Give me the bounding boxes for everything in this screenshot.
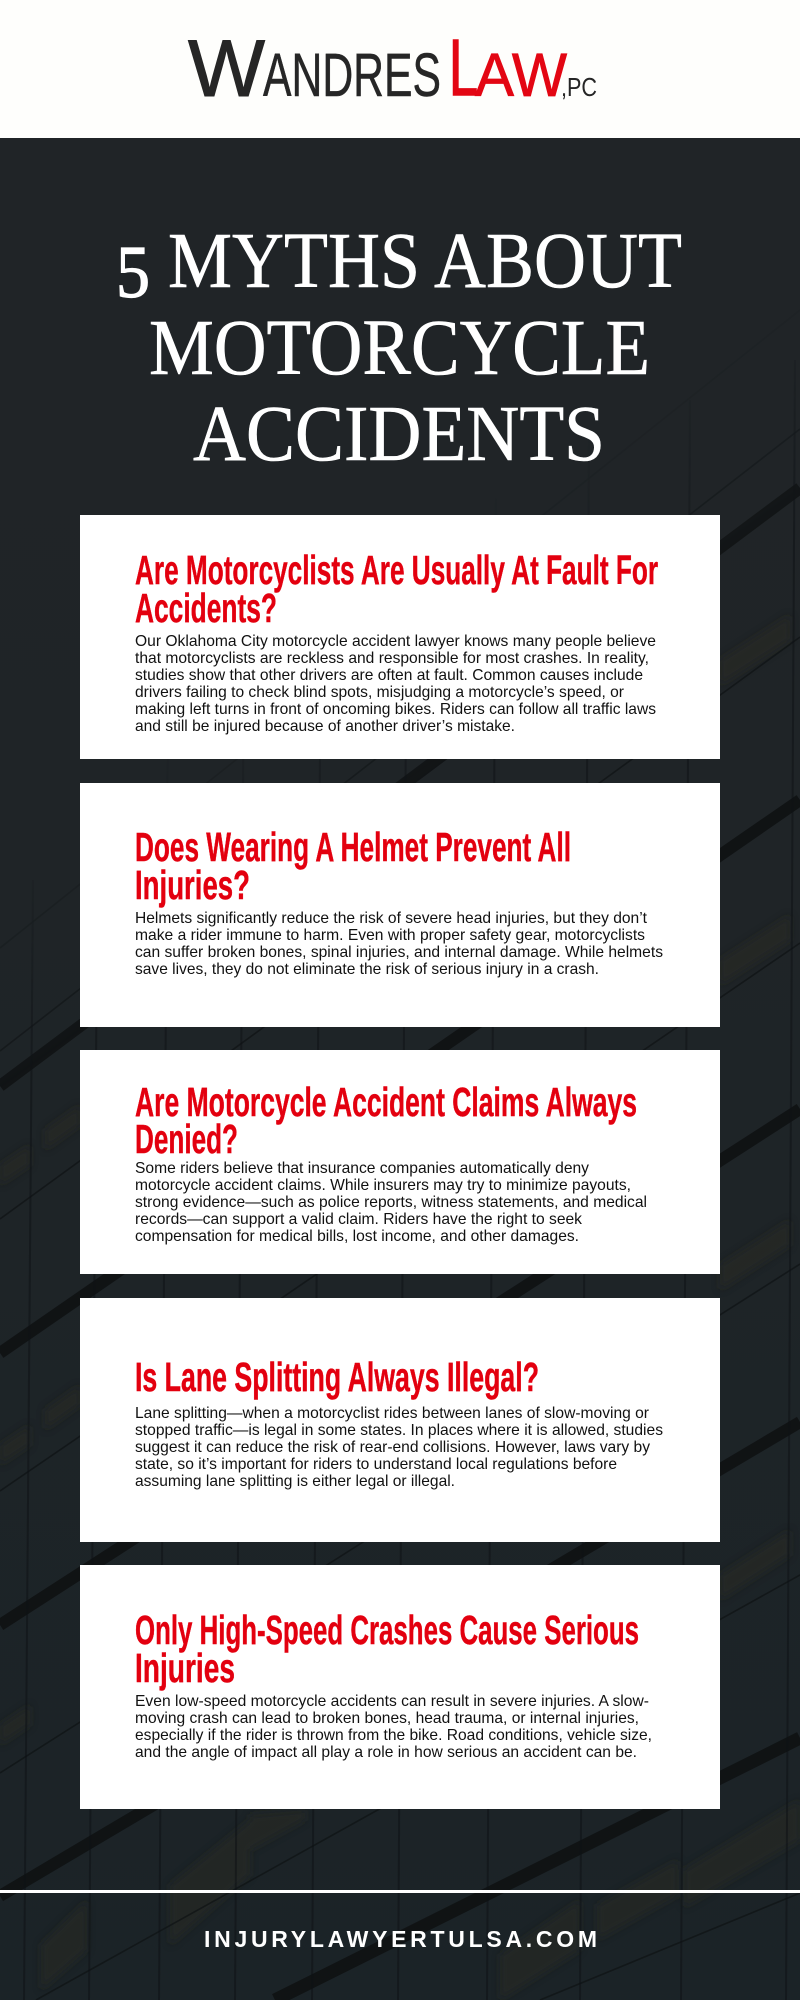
text: myth 5: and the angle of impact all play a role in how serious an accident can be. [135, 1744, 637, 1761]
text: myth 1: drivers failing to check blind spots, misjudging a motorcycle’s speed, or [135, 684, 625, 701]
text: myth 4: assuming lane splitting is either legal or illegal. [135, 1473, 455, 1490]
title: 5 [116, 232, 150, 314]
text: myth 2: make a rider immune to harm. Even with proper safety gear, motorcyclists [135, 927, 645, 944]
text: myth 1 [135, 633, 656, 735]
footer divider [0, 1890, 800, 1893]
footer website: INJURYLAWYERTULSA.COM [204, 1926, 597, 1952]
heading: myth 5: Injuries [135, 1645, 235, 1691]
logo: Wandres Law, PC: AW [475, 41, 567, 109]
logo: Wandres Law, PC: ,PC [561, 72, 597, 102]
text: myth 1: that motorcyclists are reckless and responsible for most crashes. In reality, [135, 650, 649, 667]
heading: myth 5 [135, 1607, 639, 1691]
text: myth 3 [135, 1160, 647, 1245]
text: myth 4: state, so it’s important for riders to understand local regulations before [135, 1456, 617, 1473]
logo: Wandres Law, PC: W [188, 24, 266, 114]
text: myth 3: Some riders believe that insurance companies automatically deny [135, 1160, 589, 1177]
panel: myth 4 [80, 1298, 720, 1542]
text: myth 3: compensation for medical bills, lost income, and other damages. [135, 1228, 579, 1245]
text: myth 1: Our Oklahoma City motorcycle accident lawyer knows many people believe [135, 633, 656, 650]
title [116, 218, 682, 478]
text: myth 3: motorcycle accident claims. While insurers may try to minimize payouts, [135, 1177, 631, 1194]
text: myth 5: especially if the rider is thrown from the bike. Road conditions, vehicle size, [135, 1727, 652, 1744]
logo: Wandres Law, PC: ANDRES [263, 41, 441, 109]
text: myth 1: studies show that other drivers are often at fault. Common causes include [135, 667, 643, 684]
heading: myth 4: Is Lane Splitting Always Illegal? [135, 1354, 539, 1400]
panel: myth 5 [80, 1565, 720, 1809]
text: myth 3: strong evidence—such as police reports, witness statements, and medical [135, 1194, 647, 1211]
text: myth 5: Even low-speed motorcycle accidents can result in severe injuries. A slow- [135, 1693, 649, 1710]
text: myth 2: Helmets significantly reduce the risk of severe head injuries, but they don’t [135, 910, 648, 927]
panel: myth 2 [80, 783, 720, 1027]
panel: myth 1 [80, 515, 720, 759]
heading: myth 2 [135, 824, 571, 908]
heading: myth 2: Does Wearing A Helmet Prevent All [135, 824, 571, 870]
text: myth 1: making left turns in front of oncoming bikes. Riders can follow all traffic laws [135, 701, 656, 718]
text: myth 5 [135, 1693, 652, 1761]
header band [0, 0, 800, 138]
text: myth 3: records—can support a valid claim. Riders have the right to seek [135, 1211, 583, 1228]
text: myth 2: can suffer broken bones, spinal injuries, and internal damage. While helmets [135, 944, 663, 961]
heading: myth 1 [135, 547, 658, 631]
logo: Wandres Law, PC: L [449, 23, 478, 112]
heading: myth 2: Injuries? [135, 862, 250, 908]
heading: myth 3: Denied? [135, 1116, 238, 1162]
text: myth 5: moving crash can lead to broken bones, head trauma, or internal injuries, [135, 1710, 639, 1727]
text: myth 4: stopped traffic—is legal in some states. In places where it is allowed, studies [135, 1422, 663, 1439]
heading: myth 3 [135, 1079, 637, 1162]
text: myth 4: Lane splitting—when a motorcyclist rides between lanes of slow-moving or [135, 1405, 650, 1422]
logo: Wandres Law, PC [188, 23, 597, 114]
text: myth 2 [135, 910, 663, 978]
heading: myth 1: Accidents? [135, 585, 277, 631]
text: myth 2: save lives, they do not eliminate the risk of serious injury in a crash. [135, 961, 599, 978]
title: MOTORCYCLE [149, 305, 650, 392]
text: myth 1: and still be injured because of another driver’s mistake. [135, 718, 515, 735]
text: myth 4 [135, 1405, 663, 1490]
text: myth 4: suggest it can reduce the risk of rear-end collisions. However, laws vary by [135, 1439, 650, 1456]
title: ACCIDENTS [193, 391, 605, 478]
title: MYTHS ABOUT [168, 218, 682, 305]
panel: myth 3 [80, 1050, 720, 1274]
background: dark building facade [0, 432, 800, 2000]
